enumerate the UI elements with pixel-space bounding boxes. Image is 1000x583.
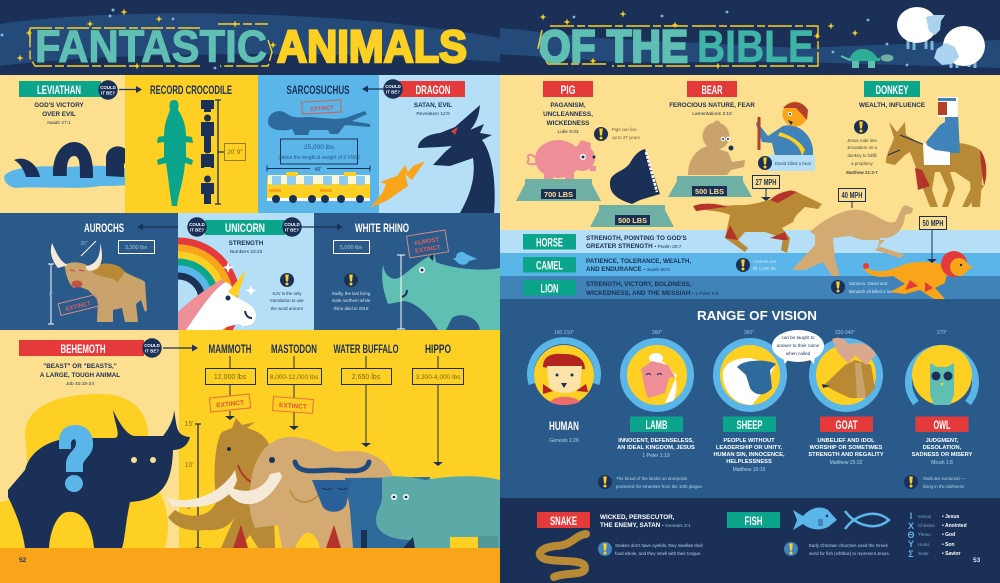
meaning: Owl: Micah 1:8 [931, 460, 953, 466]
weight box [118, 240, 154, 254]
illustration: aurochs [51, 243, 147, 322]
panel: Aurochs [0, 213, 185, 330]
meaning text: Revelation 12:9 [416, 111, 450, 117]
meaning text: Pig: PAGANISM, [550, 102, 586, 109]
question mark [59, 425, 93, 492]
illustration: camel [792, 205, 913, 276]
rhino eye and mouth [402, 252, 434, 297]
speech bubble: sheep: can be taught to [782, 335, 815, 340]
fact: fish [784, 542, 890, 556]
fact: Jesus: donkey to fulfill [847, 153, 877, 158]
page number 53: 53 [973, 557, 981, 564]
weight box: 3,300 lbs [125, 245, 147, 251]
ichthys table: Soter [918, 551, 929, 556]
stamp: extinct: EXTINCT [310, 105, 335, 113]
meaning: Owl [912, 438, 973, 466]
vision: lamb [624, 342, 690, 408]
tag: 27 mph: 27 MPH [756, 178, 777, 187]
ichthys table: X [908, 521, 914, 531]
fact: lions [831, 280, 894, 294]
label: Unicorn [205, 220, 285, 235]
fact: pigs [594, 127, 641, 141]
illustration: David [756, 102, 813, 156]
meaning text: Bear: FEROCIOUS NATURE, FEAR [669, 102, 755, 109]
meaning text: Lion [586, 281, 719, 297]
label: Goat [820, 416, 873, 432]
illustration: mastodon [228, 437, 394, 548]
ichthys table [907, 511, 967, 559]
fact: KJV [270, 273, 304, 311]
icon: ichthys [845, 511, 889, 529]
panel: Pig, Bear, Donkey [500, 75, 1000, 230]
ichthys table: Christos [918, 523, 935, 528]
label: Leviathan [19, 81, 101, 97]
vision: human [530, 341, 598, 405]
illustration: snake [540, 534, 586, 577]
fact: snake: food whole, and they smell with their tongue. [615, 551, 702, 556]
degree labels: 360° [652, 330, 662, 336]
degree labels [554, 330, 947, 336]
fact: David [758, 155, 815, 171]
meaning text: Pig [543, 102, 593, 135]
meaning text: Numbers 23:22 [230, 249, 263, 255]
meaning text: Lion: STRENGTH, VICTORY, BOLDNESS, [586, 281, 692, 288]
icon: tortoise [841, 49, 894, 68]
label: Sheep: SHEEP [736, 418, 762, 432]
label: Bear: BEAR [702, 83, 723, 97]
illustration: rhino [382, 252, 500, 330]
meaning: Lamb: INNOCENT, DEFENSELESS, [618, 438, 694, 444]
ichthys table: • Savior [942, 551, 960, 557]
degree labels: 160-210° [554, 330, 574, 336]
heading: range of vision: RANGE OF VISION [697, 308, 817, 323]
fact: last male: rhino died in 2018 [334, 306, 369, 311]
meaning: Goat [808, 438, 884, 466]
stamp: almost extinct: EXTINCT [415, 245, 441, 255]
column headings [208, 342, 451, 356]
meaning: Owl: DESOLATION, [923, 445, 962, 451]
scale: pig [516, 179, 601, 201]
meaning: Goat: Matthew 25:32 [830, 460, 863, 466]
tag: 50 mph [920, 216, 946, 263]
weights: 8,000-12,000 lbs [270, 374, 319, 381]
height scale [397, 255, 405, 329]
tag: 27 mph [752, 176, 780, 201]
fact: owls: Owls are nocturnal — [923, 476, 966, 481]
meaning: Owl: JUDGMENT, [926, 438, 959, 444]
degree labels: 320-340° [835, 330, 855, 336]
label: Bear [687, 81, 737, 97]
stamp: almost extinct: ALMOST [414, 237, 440, 247]
label: Lion [523, 280, 576, 296]
label: Unicorn: UNICORN [225, 221, 265, 235]
label: Donkey [864, 81, 920, 97]
meaning: Snake: THE ENEMY, SATAN • Genesis 3:1 [600, 522, 691, 529]
ichthys table: • Anointed [942, 523, 967, 529]
fact: snake [598, 542, 704, 556]
meaning: Snake: WICKED, PERSECUTOR, [600, 514, 675, 521]
meaning text: "BEAST" OR "BEASTS," [43, 363, 117, 370]
fact: camels: lift 1,000 lbs [753, 266, 777, 271]
illustration: piano [610, 149, 660, 204]
label: Camel: CAMEL [536, 258, 563, 272]
fact: lamb blood: protected the Israelites from the 10th plague [616, 484, 702, 489]
meaning: Goat: WORSHIP OR SOMETIMES [810, 445, 883, 451]
label: Horse: HORSE [536, 236, 563, 250]
meaning text: Pig: WICKEDNESS [547, 120, 589, 127]
weights: 2,650 lbs [352, 374, 381, 381]
vision: owl [908, 345, 976, 405]
fact: last male: male northern white [332, 298, 371, 303]
meaning: Goat: STRENGTH AND REGALITY [808, 452, 884, 458]
fact: fish: word for fish (Ichthus) to represent Jesus. [809, 551, 890, 556]
degree labels: 270° [937, 330, 947, 336]
ichthys table: Iesous [918, 514, 932, 519]
meaning text: OVER EVIL [42, 111, 76, 118]
weights: 3,300-4,000 lbs [416, 374, 461, 381]
speech bubble: sheep: answer to their name [777, 343, 820, 348]
scale: piano: 500 LBS [618, 218, 647, 225]
illustration: mammoth [167, 418, 275, 548]
arrow to White rhino [300, 224, 343, 230]
weight box: 25,000 lbs [304, 144, 335, 151]
title: Of the Bible: OF THE [539, 21, 688, 72]
piano keys [646, 152, 657, 192]
title: Of the Bible [538, 21, 818, 72]
weight box [278, 139, 360, 164]
badge: could it be (Dragon) [383, 79, 403, 99]
fact: owls: living in the darkness [923, 484, 965, 489]
arrow: Sarcosuchus [362, 86, 385, 92]
illustration: two buses [267, 172, 370, 203]
meaning text: Horse: GREATER STRENGTH • Psalm 20:7 [586, 243, 682, 250]
meaning text [34, 102, 85, 126]
illustration: rider [923, 97, 960, 165]
label: Lamb [630, 416, 683, 432]
meaning: Lamb: AN IDEAL KINGDOM, JESUS [617, 445, 695, 451]
meaning: Lamb: 1 Peter 1:19 [642, 453, 670, 459]
label: Snake: SNAKE [550, 514, 577, 528]
illustration: water buffalo [295, 462, 435, 548]
label: Behemoth: BEHEMOTH [60, 342, 106, 356]
ichthys table: Θ [907, 530, 915, 540]
label: Snake [537, 512, 590, 528]
weight box: 5,000 lbs [340, 245, 362, 251]
meaning: Sheep: HELPLESSNESS [726, 459, 772, 465]
scale: bear: 500 LBS [695, 189, 724, 196]
fact: Jesus: Jesus rode into [847, 138, 877, 143]
meaning: Sheep: LEADERSHIP OR UNITY, [716, 445, 783, 451]
title: Fantastic Animals: ANIMALS [277, 21, 467, 72]
panel: Sarcosuchus [258, 75, 379, 213]
panel: Leviathan [0, 75, 141, 213]
icon: three people scale [201, 100, 214, 204]
title: Fantastic Animals [30, 21, 467, 72]
illustration: donkey [886, 122, 986, 207]
meaning text [40, 363, 120, 387]
badge: could it be (Leviathan) [98, 80, 118, 100]
fact: last male [332, 273, 371, 311]
drop arrowheads [225, 416, 443, 466]
panel: Unicorn [178, 213, 314, 330]
fact: lamb blood: The blood of the lambs on doorposts [616, 476, 688, 481]
ichthys table: I [910, 511, 912, 521]
fact: KJV: translation to use [270, 298, 304, 303]
label: Goat: GOAT [836, 418, 858, 432]
drop lines [230, 356, 438, 462]
fact: fish: Early Christian churches used the Greek [809, 543, 889, 548]
arrow to Aurochs [137, 224, 185, 230]
heading: White rhino: WHITE RHINO [355, 221, 409, 235]
fact: Jesus [846, 120, 878, 175]
illustration: pig [527, 140, 596, 179]
ichthys table: • Jesus [942, 514, 960, 520]
icon: fish [793, 508, 837, 530]
label: Camel [523, 257, 576, 272]
weight boxes [206, 368, 464, 384]
ichthys table: Σ [908, 549, 914, 559]
meaning: Sheep: PEOPLE WITHOUT [723, 438, 775, 444]
meaning text: GOD'S VICTORY [34, 102, 85, 109]
illustration: dragon [418, 105, 495, 213]
column headings: HIPPO [425, 342, 451, 356]
fact: lions: Samson, David and [849, 281, 888, 286]
weights [214, 374, 461, 381]
meaning text: Pig: UNCLEANNESS, [543, 111, 593, 118]
speech bubble: sheep: when called [786, 351, 811, 356]
fact: KJV: the word unicorn [271, 306, 304, 311]
column headings: WATER BUFFALO [334, 342, 398, 356]
heading: Sarcosuchus: SARCOSUCHUS [286, 83, 350, 97]
label: Leviathan: LEVIATHAN [37, 83, 81, 97]
fact: owls [904, 475, 966, 489]
meaning text: Bear: Lamentations 3:10 [692, 111, 732, 117]
meaning text: Camel: AND ENDURANCE • Isaiah 60:6 [586, 266, 670, 273]
stamp: almost extinct [407, 230, 448, 258]
height scale [48, 264, 54, 324]
meaning text: Horse [586, 235, 687, 250]
fact: camels: Camels can [753, 259, 777, 264]
fact: Jesus: Jerusalem on a [847, 145, 878, 150]
badge: could it be (Unicorn right) [282, 217, 302, 237]
stamps: extinct: EXTINCT [216, 400, 244, 409]
length line: 40' [315, 167, 321, 173]
meaning text: Bear [669, 102, 755, 117]
label: Pig [543, 81, 593, 97]
label: Human: HUMAN [549, 419, 579, 433]
illustration: lion [863, 251, 973, 299]
heading: record crocodile: RECORD CROCODILE [150, 83, 232, 97]
ground strip [0, 548, 500, 583]
meaning: Owl: SADNESS OR MISERY [912, 452, 973, 458]
meaning: Goat: UNBELIEF AND IDOL [817, 438, 875, 444]
degree labels: 360° [744, 330, 754, 336]
height scale [184, 421, 201, 548]
label: Owl [916, 416, 968, 432]
illustration: bear [688, 120, 745, 175]
bands: horse, camel, lion [500, 230, 1000, 299]
fact: camels [736, 258, 777, 272]
meaning: Snake [600, 514, 691, 529]
meaning: Sheep [713, 438, 785, 473]
height scale: 5' [186, 504, 192, 511]
ichthys table: Y [908, 539, 914, 549]
meaning text: Camel: PATIENCE, TOLERANCE, WEALTH, [586, 258, 691, 265]
label: Lamb: LAMB [646, 418, 668, 432]
column headings: MASTODON [271, 342, 317, 356]
illustration: sea monster [4, 142, 141, 188]
panel: record crocodile [119, 75, 258, 213]
meaning text: Donkey: WEALTH, INFLUENCE [859, 102, 925, 109]
panel: White rhino [300, 213, 500, 330]
scale: bear [668, 176, 752, 197]
meaning text: A LARGE, TOUGH ANIMAL [40, 372, 120, 379]
fact: snake: Snakes don't have eyelids, they swallow their [615, 543, 704, 548]
illustration: sarcosuchus [268, 111, 370, 135]
illustration: bird [453, 252, 477, 265]
arrow to record crocodile [119, 86, 142, 93]
tag: 40 mph [838, 188, 866, 208]
label: Dragon: DRAGON [416, 83, 450, 97]
illustration: crocodile [157, 100, 193, 206]
illustration: Behemoth silhouette [8, 410, 190, 548]
illustration: unicorn [178, 262, 256, 330]
fact: pigs: up to 27 years [612, 135, 641, 140]
weights: 12,000 lbs [214, 374, 247, 381]
stamp: extinct: EXTINCT [65, 301, 92, 313]
meaning: Sheep: Matthew 10:16 [733, 467, 766, 473]
horn dimension [80, 241, 96, 256]
speech bubble: sheep [772, 330, 824, 364]
fact: Jesus: a prophecy [851, 161, 874, 166]
fact: David: David killed a bear [775, 161, 812, 166]
meaning: Sheep: HUMAN SIN, INNOCENCE, [713, 452, 785, 458]
vision: sheep [716, 342, 784, 408]
tag: 40 mph: 40 MPH [842, 191, 863, 200]
decorative stars [0, 8, 908, 70]
dragon eye [451, 127, 458, 135]
vision: goat [812, 338, 880, 408]
yellow blobs [0, 394, 168, 548]
fact: lions: Benaiah all killed a lion [849, 289, 894, 294]
label: Behemoth [19, 340, 144, 356]
label: Lion: LION [540, 282, 558, 296]
illustration: horse [693, 190, 822, 253]
meaning text: Horse: STRENGTH, POINTING TO GOD'S [586, 235, 687, 242]
tag: 50 mph: 50 MPH [922, 219, 944, 228]
ichthys table: • God [942, 532, 955, 538]
height scale: 6' [49, 292, 53, 298]
meaning text: Camel [586, 258, 691, 273]
weight box [334, 240, 370, 254]
fact: Jesus: Matthew 21:2-7 [846, 170, 878, 175]
stamp: extinct [58, 294, 99, 315]
page number 52: 52 [19, 557, 27, 564]
fact: last male: Sadly, the last living [332, 291, 371, 296]
icon: two sheep [897, 7, 985, 68]
scale: pig: 700 LBS [544, 192, 573, 199]
panel: Behemoth [0, 330, 179, 548]
meaning: Human: Genesis 1:26 [549, 438, 579, 444]
header background [0, 0, 1000, 75]
ichthys table: • Son [942, 542, 955, 548]
ichthys table: Theou [918, 532, 931, 537]
badge: could it be (Unicorn left) [187, 217, 207, 237]
illustration: rainbow [178, 238, 238, 330]
panel: range of vision [500, 299, 1000, 498]
stamps: extinct [209, 394, 313, 413]
fact: pigs: Pigs can live [612, 127, 637, 132]
meaning text [229, 240, 264, 255]
height scale: 10' [184, 462, 194, 469]
weight box: (about the length & weight of 2 VWs) [278, 155, 360, 161]
meaning text: Job 40:15-24 [66, 381, 94, 387]
meaning text: STRENGTH [229, 240, 264, 247]
meaning text: Isaiah 27:1 [47, 120, 71, 126]
label: Pig: PIG [560, 83, 576, 97]
ichthys table: Huios [918, 542, 930, 547]
title: Of the Bible: BIBLE [697, 21, 814, 72]
meaning text: Lion: WICKEDNESS, AND THE MESSIAH • 1 Peter 5:8 [586, 290, 719, 297]
panel: large animals [163, 330, 500, 548]
label: Sheep [723, 416, 776, 432]
meaning text: Pig: Luke 8:33 [557, 129, 579, 135]
stamps: extinct: EXTINCT [279, 402, 307, 411]
meaning text [414, 102, 452, 117]
illustration: hippo [376, 476, 500, 548]
panel: Dragon [370, 75, 500, 213]
label: Donkey: DONKEY [876, 83, 908, 97]
title: Fantastic Animals: FANTASTIC [35, 21, 267, 72]
meaning text: SATAN, EVIL [414, 102, 452, 109]
fact: KJV: KJV is the only [272, 291, 302, 296]
label: Horse [523, 234, 576, 250]
horn dimension: 30" [80, 241, 88, 247]
meaning: Lamb [617, 438, 695, 459]
height scale: 15' [184, 421, 194, 428]
heading: Aurochs: AUROCHS [84, 221, 124, 235]
scale: piano [590, 205, 674, 227]
arrow to mammoth [163, 344, 198, 352]
panel: snake and fish [500, 498, 1000, 583]
label: Fish [727, 512, 780, 528]
fact: lamb blood [598, 475, 702, 489]
label: Owl: OWL [934, 418, 950, 432]
length scale: 20' 9" [228, 150, 242, 156]
label: Fish: FISH [744, 514, 762, 528]
badge: could it be (Behemoth) [142, 338, 162, 358]
column headings: MAMMOTH [208, 342, 252, 356]
flame [370, 161, 425, 208]
